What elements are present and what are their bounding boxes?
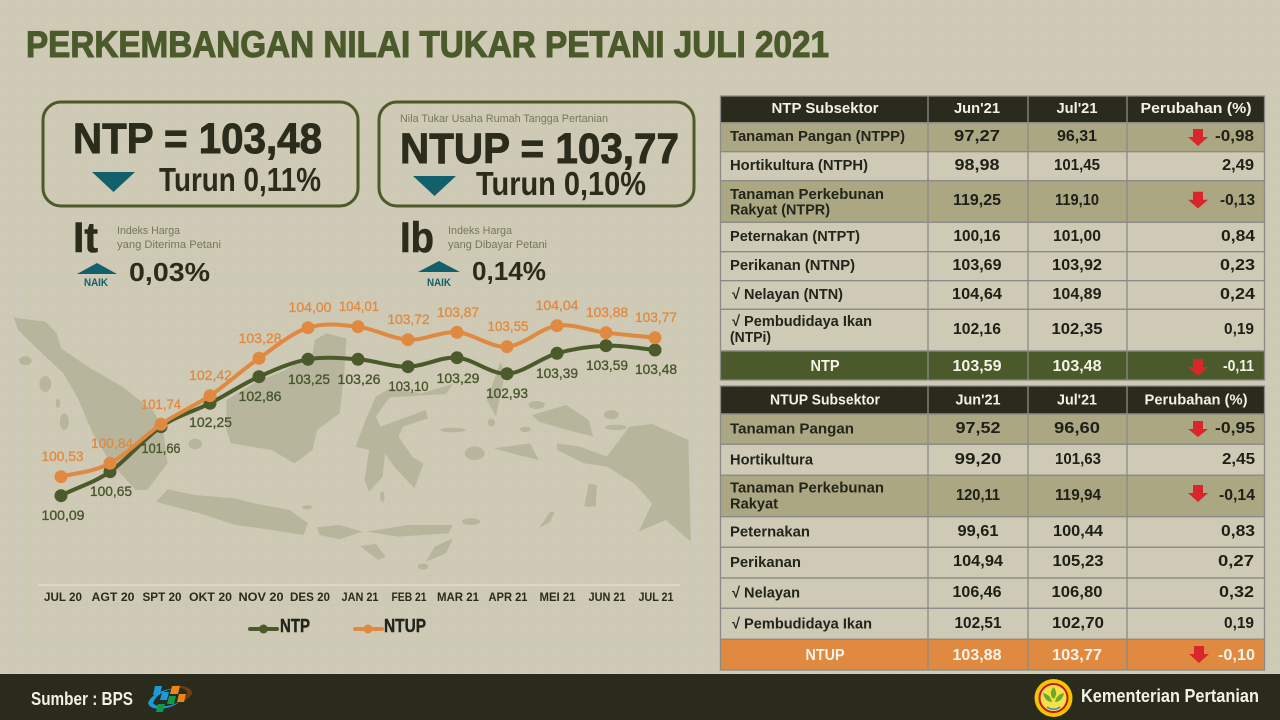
row: Nelayan: √ Nelayan (NTN)	[732, 286, 843, 303]
source text: Sumber : BPS	[31, 689, 133, 709]
row: Peternakan: 0,83	[1221, 523, 1255, 540]
row: Perikanan	[720, 547, 1264, 578]
row: Pembudidaya Ikan	[720, 309, 1264, 351]
row: NTUP total: 103,77	[1052, 647, 1102, 664]
data labels: NTUP: 103,77	[635, 309, 677, 325]
Ib direction label: NAIK	[427, 277, 451, 289]
row: Perikanan: 105,23	[1052, 553, 1104, 570]
table: NTP subsektor	[720, 96, 1264, 380]
Ib change: 0,14%	[472, 256, 546, 286]
row: Perikanan: 0,23	[1220, 257, 1255, 274]
row: Hortikultura: Hortikultura	[730, 452, 814, 468]
table header: NTP Subsektor	[772, 100, 879, 117]
row: Tanaman Perkebunan Rakyat: Rakyat	[730, 496, 778, 512]
It heading: It	[73, 214, 98, 262]
table header: Perubahan (%)	[1144, 392, 1248, 408]
row: NTP total	[720, 351, 1264, 380]
data labels: NTUP: 100,84	[91, 435, 133, 451]
data labels: NTUP: 101,74	[141, 396, 181, 412]
NTUP description: Nila Tukar Usaha Rumah Tangga Pertanian	[400, 113, 608, 125]
ministry name: Kementerian Pertanian	[1081, 686, 1259, 706]
row: Perikanan: 103,92	[1052, 257, 1102, 274]
row: Nelayan: 104,89	[1052, 286, 1102, 303]
data labels: NTP: 103,26	[338, 371, 381, 387]
row: Pembudidaya Ikan	[720, 608, 1264, 639]
row: Tanaman Perkebunan Rakyat: -0,13	[1220, 192, 1255, 209]
map of Indonesia	[14, 317, 691, 570]
row: Hortikultura: 2,49	[1222, 157, 1254, 174]
row: Tanaman Pangan: 96,60	[1054, 420, 1100, 437]
row: Pembudidaya Ikan: 102,51	[954, 615, 1002, 632]
data labels: NTP: 103,59	[586, 357, 628, 373]
row: Pembudidaya Ikan: √ Pembudidaya Ikan	[732, 313, 872, 330]
row: NTUP total: -0,10	[1218, 647, 1255, 664]
row: Nelayan: 106,80	[1052, 584, 1103, 601]
table header: Jul'21	[1056, 100, 1098, 117]
data labels: NTP: 100,65	[90, 483, 132, 499]
x axis labels: JAN 21	[342, 590, 379, 604]
row: NTUP total: 103,88	[952, 647, 1002, 664]
row: Hortikultura: 2,45	[1222, 451, 1255, 468]
x axis labels: OKT 20	[189, 590, 232, 604]
data labels: NTUP	[42, 297, 677, 464]
row: NTP total: 103,48	[1052, 358, 1102, 375]
row: Perikanan	[720, 252, 1264, 281]
row: Nelayan: 106,46	[952, 584, 1002, 601]
data labels: NTP: 103,39	[536, 365, 578, 381]
It description	[117, 225, 221, 251]
NTUP value: NTUP = 103,77	[400, 125, 679, 173]
row: Peternakan	[720, 517, 1264, 547]
x axis labels: JUN 21	[588, 590, 626, 604]
data labels: NTUP: 100,53	[42, 448, 84, 464]
row: Tanaman Pangan: -0,98	[1215, 128, 1254, 145]
row: Tanaman Perkebunan Rakyat: 119,94	[1055, 487, 1101, 504]
It change: 0,03%	[129, 257, 210, 287]
x axis labels: APR 21	[488, 590, 528, 604]
It description: Indeks Harga	[117, 225, 181, 237]
data labels: NTP: 103,48	[635, 361, 677, 377]
x axis labels: SPT 20	[142, 590, 182, 604]
row: Tanaman Perkebunan Rakyat	[720, 475, 1264, 517]
data labels: NTP: 100,09	[42, 507, 85, 523]
row: NTUP total: NTUP	[806, 647, 845, 664]
row: NTP total: 103,59	[952, 358, 1002, 375]
row: Hortikultura: 99,20	[954, 451, 1002, 468]
Ib description: yang Dibayar Petani	[448, 239, 547, 251]
NTP value: NTP = 103,48	[73, 115, 322, 163]
row: Peternakan: 101,00	[1053, 228, 1101, 245]
x axis labels: DES 20	[290, 590, 330, 604]
table: NTUP subsektor	[720, 386, 1264, 670]
row: Peternakan: 99,61	[958, 523, 999, 540]
icon: up triangle	[418, 261, 460, 272]
legend	[250, 616, 426, 636]
row: Pembudidaya Ikan: (NTPi)	[730, 329, 771, 346]
line series: NTP	[54, 339, 662, 502]
row: Hortikultura: 98,98	[954, 157, 1000, 174]
row: Tanaman Pangan	[720, 123, 1264, 152]
row: Hortikultura	[720, 444, 1264, 475]
x axis labels: JUL 20	[44, 590, 82, 604]
row: Tanaman Pangan: Tanaman Pangan	[730, 420, 854, 438]
row: Tanaman Pangan	[720, 414, 1264, 444]
data labels: NTUP: 103,55	[488, 318, 529, 334]
data labels: NTUP: 103,87	[437, 304, 479, 320]
row: Tanaman Perkebunan Rakyat: 119,10	[1055, 192, 1099, 209]
data labels: NTUP: 103,28	[238, 330, 282, 346]
Ib description	[448, 225, 547, 251]
data labels: NTP	[42, 357, 677, 523]
footer bar	[0, 674, 1280, 720]
data labels: NTP: 102,86	[238, 388, 282, 404]
row: Perikanan: 103,69	[952, 257, 1002, 274]
panel: chart	[14, 280, 697, 645]
x axis labels: AGT 20	[92, 590, 135, 604]
It description: yang Diterima Petani	[117, 239, 221, 251]
row: Peternakan: 100,44	[1053, 523, 1103, 540]
Ib description: Indeks Harga	[448, 225, 513, 237]
row: Tanaman Pangan: 97,52	[956, 420, 1001, 437]
data labels: NTP: 103,10	[388, 378, 429, 394]
table header: NTUP Subsektor	[770, 392, 880, 408]
row: Perikanan: 0,27	[1218, 553, 1254, 570]
icon: Kementerian Pertanian logo	[1034, 679, 1072, 717]
data labels: NTP: 102,93	[486, 385, 528, 401]
row: Tanaman Pangan: -0,95	[1215, 420, 1255, 437]
row: Perikanan: 104,94	[953, 553, 1003, 570]
row: Nelayan: 104,64	[952, 286, 1002, 303]
row: Pembudidaya Ikan: 0,19	[1224, 321, 1254, 338]
row: Hortikultura: Hortikultura (NTPH)	[730, 157, 868, 174]
row: Peternakan: Peternakan (NTPT)	[730, 228, 860, 245]
row: Peternakan: Peternakan	[730, 524, 810, 540]
data labels: NTP: 102,25	[189, 414, 232, 430]
panel: Ib index	[400, 214, 547, 289]
NTUP change: Turun 0,10%	[476, 165, 646, 202]
row: Tanaman Pangan: 97,27	[954, 128, 1000, 145]
data labels: NTUP: 102,42	[189, 367, 232, 383]
row: Peternakan	[720, 222, 1264, 252]
data labels: NTP: 103,29	[436, 370, 480, 386]
row: Nelayan	[720, 578, 1264, 608]
row: Perikanan: Perikanan (NTNP)	[730, 257, 855, 274]
row: Tanaman Perkebunan Rakyat	[720, 181, 1264, 222]
x axis line	[38, 584, 680, 586]
row: Tanaman Perkebunan Rakyat: Tanaman Perkebunan	[730, 186, 884, 203]
table header: Perubahan (%)	[1140, 100, 1252, 117]
icon: up triangle	[77, 263, 117, 274]
table header: Jun'21	[956, 392, 1000, 408]
Ib heading: Ib	[400, 214, 434, 262]
x axis labels: JUL 21	[638, 590, 674, 604]
row: Tanaman Pangan: 96,31	[1057, 128, 1097, 145]
x axis labels	[44, 590, 674, 604]
row: Nelayan: √ Nelayan	[732, 584, 800, 602]
x axis labels: MEI 21	[540, 590, 576, 604]
row: Tanaman Perkebunan Rakyat: -0,14	[1219, 487, 1255, 504]
table header	[720, 386, 1264, 414]
panel: It index	[73, 214, 221, 289]
row: Pembudidaya Ikan: 102,35	[1052, 321, 1103, 338]
row: Pembudidaya Ikan: 102,16	[953, 321, 1001, 338]
row: Tanaman Perkebunan Rakyat: 120,11	[956, 487, 1000, 504]
legend: NTP	[280, 616, 310, 636]
row: Pembudidaya Ikan: √ Pembudidaya Ikan	[732, 616, 872, 632]
row: Hortikultura: 101,63	[1055, 451, 1101, 468]
x axis labels: MAR 21	[437, 590, 479, 604]
row: Peternakan: 0,84	[1221, 228, 1255, 245]
table header: Jun'21	[954, 100, 1000, 117]
data labels: NTUP: 103,88	[586, 304, 628, 320]
row: Perikanan: Perikanan	[730, 554, 801, 571]
row: Nelayan	[720, 281, 1264, 309]
row: Hortikultura: 101,45	[1054, 157, 1100, 174]
data labels: NTUP: 104,00	[288, 299, 332, 315]
It direction label: NAIK	[84, 277, 108, 289]
icon: down triangle	[413, 176, 456, 196]
row: NTUP total	[720, 639, 1264, 670]
panel: NTUP summary	[379, 102, 694, 206]
data labels: NTUP: 104,04	[536, 297, 579, 313]
row: Nelayan: 0,32	[1219, 584, 1254, 601]
row: Pembudidaya Ikan: 102,70	[1052, 615, 1104, 632]
data labels: NTUP: 104,01	[339, 298, 379, 314]
title: PERKEMBANGAN NILAI TUKAR PETANI JULI 2021	[26, 24, 829, 65]
row: Tanaman Perkebunan Rakyat: Tanaman Perkebunan	[730, 480, 884, 496]
row: NTP total: NTP	[810, 358, 840, 375]
data labels: NTP: 101,66	[142, 440, 181, 456]
data labels: NTUP: 103,72	[388, 311, 430, 327]
legend: NTUP	[384, 616, 426, 636]
table header	[720, 96, 1264, 123]
row: Pembudidaya Ikan: 0,19	[1224, 615, 1254, 632]
x axis labels: FEB 21	[392, 590, 427, 604]
x axis labels: NOV 20	[238, 590, 284, 604]
icon: BPS logo	[148, 686, 192, 712]
data labels: NTP: 103,25	[288, 371, 330, 387]
line series: NTUP	[54, 319, 662, 483]
panel: NTP summary	[43, 102, 358, 206]
NTP change: Turun 0,11%	[159, 161, 321, 198]
row: NTP total: -0,11	[1223, 358, 1254, 375]
row: Hortikultura	[720, 152, 1264, 181]
row: Tanaman Perkebunan Rakyat: Rakyat (NTPR)	[730, 202, 830, 218]
row: Nelayan: 0,24	[1220, 286, 1255, 303]
row: Tanaman Pangan: Tanaman Pangan (NTPP)	[730, 128, 905, 145]
row: Peternakan: 100,16	[954, 228, 1001, 245]
icon: down triangle	[92, 172, 135, 192]
table header: Jul'21	[1057, 392, 1097, 408]
row: Tanaman Perkebunan Rakyat: 119,25	[953, 192, 1001, 209]
